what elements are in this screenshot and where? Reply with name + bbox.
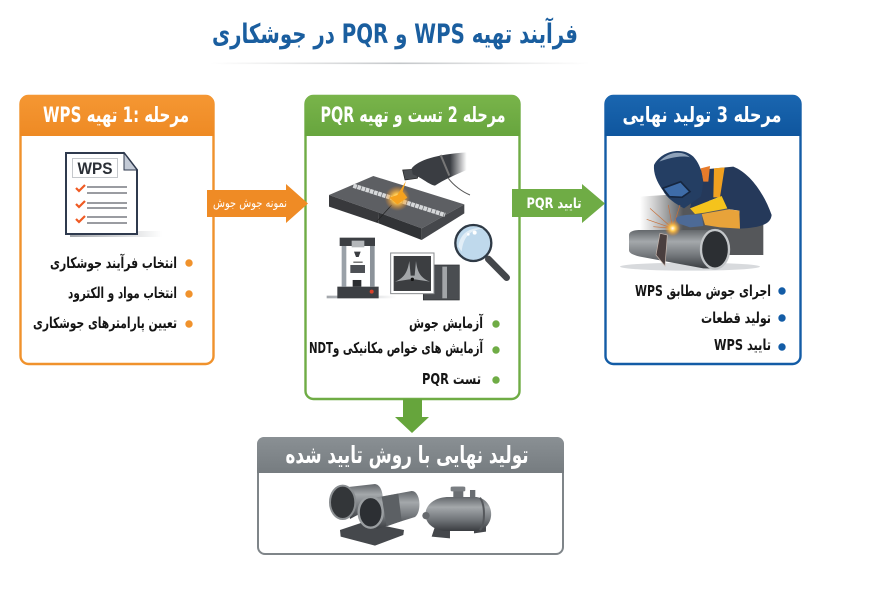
panel: stage 3 final production xyxy=(605,95,801,364)
icon: WPS document xyxy=(66,153,162,237)
sparks xyxy=(647,205,681,236)
stage 1 heading xyxy=(20,95,214,136)
final panel heading: تولید نهایی با روش تایید شده xyxy=(286,441,528,469)
gloved hand and torch xyxy=(403,152,470,195)
stage 1 list: تعیین پارامترهای جوشکاری xyxy=(33,314,177,333)
icon: weld test illustration xyxy=(327,152,507,300)
title: فرآیند تهیه WPS و PQR در جوشکاری xyxy=(212,17,578,50)
stage 3 list xyxy=(635,282,786,354)
icon: welder on pipe xyxy=(620,151,772,271)
stage 3 list: اجرای جوش مطابق WPS xyxy=(635,282,771,300)
pressure vessel xyxy=(422,487,491,538)
welder body xyxy=(675,166,772,229)
stage 1 list: انتخاب مواد و الکترود xyxy=(68,284,177,302)
stage 1 list: انتخاب فرآیند جوشکاری xyxy=(50,254,177,272)
stage 2 list: آزمایش های خواص مکانیکی وNDT xyxy=(309,339,484,357)
stage 3 heading: مرحله 3 تولید نهایی xyxy=(622,103,782,127)
pipes on base plate xyxy=(330,484,419,546)
arrow: PQR approval from stage 2 to stage 3: تایید PQR xyxy=(526,196,582,212)
welding helmet xyxy=(654,151,703,208)
stage 2 heading xyxy=(305,95,520,136)
panel: stage 1 WPS preparation xyxy=(20,95,214,364)
welded plates xyxy=(329,176,464,240)
stage 3 heading xyxy=(605,95,801,136)
arrow: weld sample from stage 1 to stage 2 xyxy=(207,184,308,223)
weld spark xyxy=(385,181,410,211)
stage 1 heading: مرحله :1 تهیه WPS xyxy=(43,103,189,127)
pipe xyxy=(620,230,760,271)
icon: WPS document: WPS xyxy=(78,159,112,178)
icon: magnifying glass xyxy=(455,225,507,278)
arrow: weld sample from stage 1 to stage 2: نمونه جوش جوش xyxy=(213,196,287,211)
stage 3 list: تایید WPS xyxy=(714,336,771,354)
panel: final approved production xyxy=(257,437,564,554)
panel: stage 2 test and PQR xyxy=(305,95,520,399)
stage 2 heading: مرحله 2 تست و تهیه PQR xyxy=(320,103,506,127)
arrow: PQR approval from stage 2 to stage 3 xyxy=(512,184,605,223)
arrow: stage 2 down to final production xyxy=(395,399,429,433)
stage 1 list xyxy=(33,254,193,333)
stage 2 list xyxy=(309,314,500,388)
micrograph image xyxy=(391,253,459,300)
stage 2 list: تست PQR xyxy=(422,370,481,388)
tensile testing machine xyxy=(327,238,397,298)
final panel heading xyxy=(257,437,564,473)
stage 2 list: آزمایش جوش xyxy=(409,314,484,332)
stage 3 list: تولید قطعات xyxy=(701,309,771,327)
backdrop xyxy=(640,193,763,255)
icon: pipes and pressure vessel xyxy=(330,484,491,546)
